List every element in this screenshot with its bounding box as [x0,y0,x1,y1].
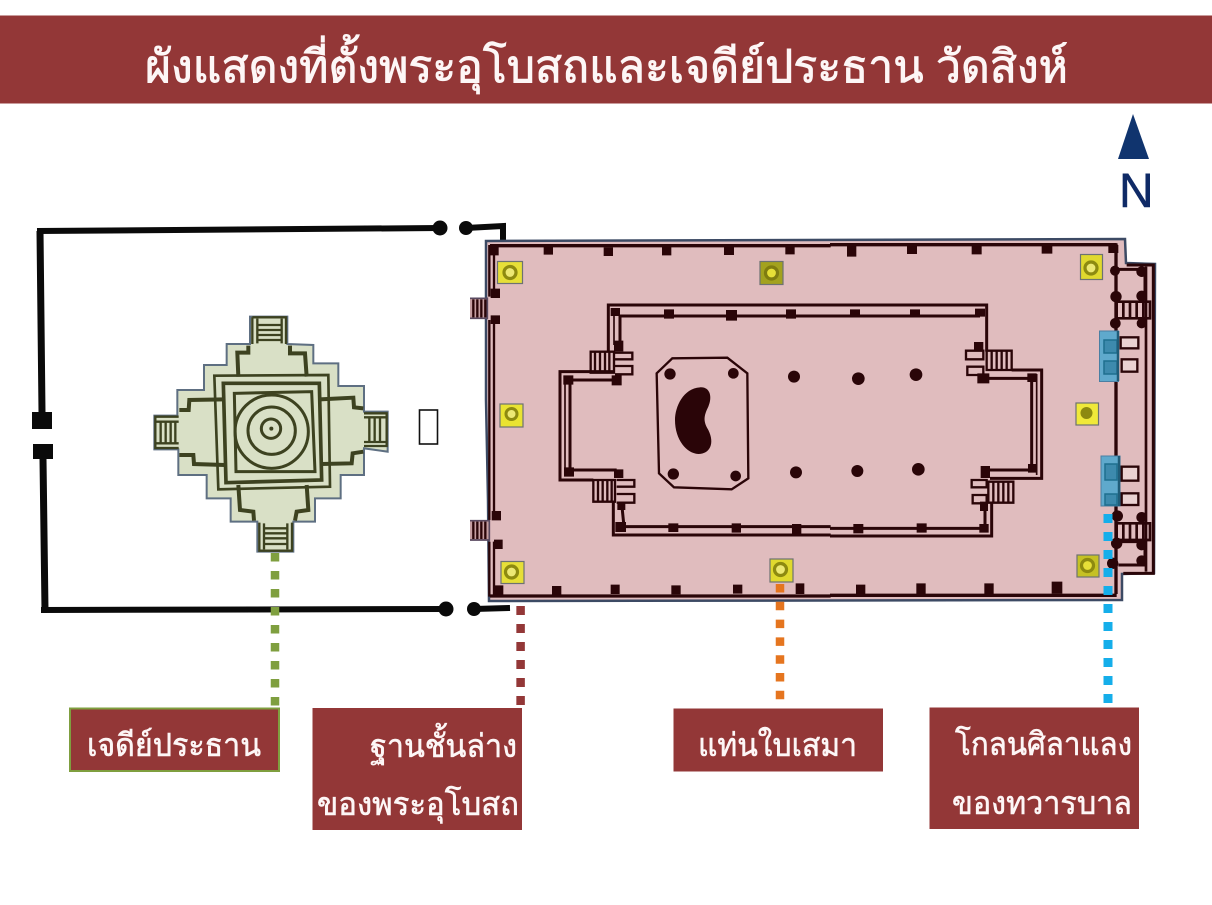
pedestal pair north [1100,331,1118,382]
icon: north arrow: N [1119,165,1154,218]
main chedi plan [154,317,388,552]
label: laterite guardian pedestals: ของทวารบาล [952,785,1132,821]
label: lower base of the ordination hall: ของพระอุโบสถ [317,786,519,824]
sema base east [1076,403,1098,425]
sema base west [500,404,523,427]
label: main chedi: เจดีย์ประธาน [87,727,261,763]
sema base north-east [1080,254,1102,280]
label: main chedi [70,708,279,771]
title banner: ผังแสดงที่ตั้งพระอุโบสถและเจดีย์ประธาน วัดสิงห์ [145,34,1068,94]
small altar rectangle [420,410,438,444]
ordination hall plan [470,239,1155,601]
label: lower base of the ordination hall [312,708,522,830]
icon: north arrow [1118,114,1154,218]
hall walls and cella, west half [470,245,831,597]
leader line: chedi [271,553,279,708]
label: laterite guardian pedestals: โกลนศิลาแลง [955,726,1132,762]
pedestal pair south [1101,456,1120,506]
label: sema base: แท่นใบเสมา [698,727,857,763]
title banner [0,16,1212,104]
hall base platform [486,239,1155,601]
leader line: guardian pedestals [1104,514,1112,704]
principal Buddha image base [675,387,711,454]
sema base south-east [1077,555,1099,577]
leader line: sema base [776,584,784,700]
sema base south [770,559,793,582]
leader line: hall base [516,606,525,706]
sema base south-west [501,562,524,584]
boundary stones: yellow sema bases [498,254,1102,584]
label: sema base [674,708,883,772]
label: lower base of the ordination hall: ฐานชั้นล่าง [370,723,517,766]
label: laterite guardian pedestals [930,708,1139,829]
hall walls and annex, east half [830,243,1153,595]
sema base north-west [498,262,522,284]
sema base north [760,262,783,284]
enclosure wall [32,220,510,616]
laterite guardian pedestals [1100,331,1120,506]
